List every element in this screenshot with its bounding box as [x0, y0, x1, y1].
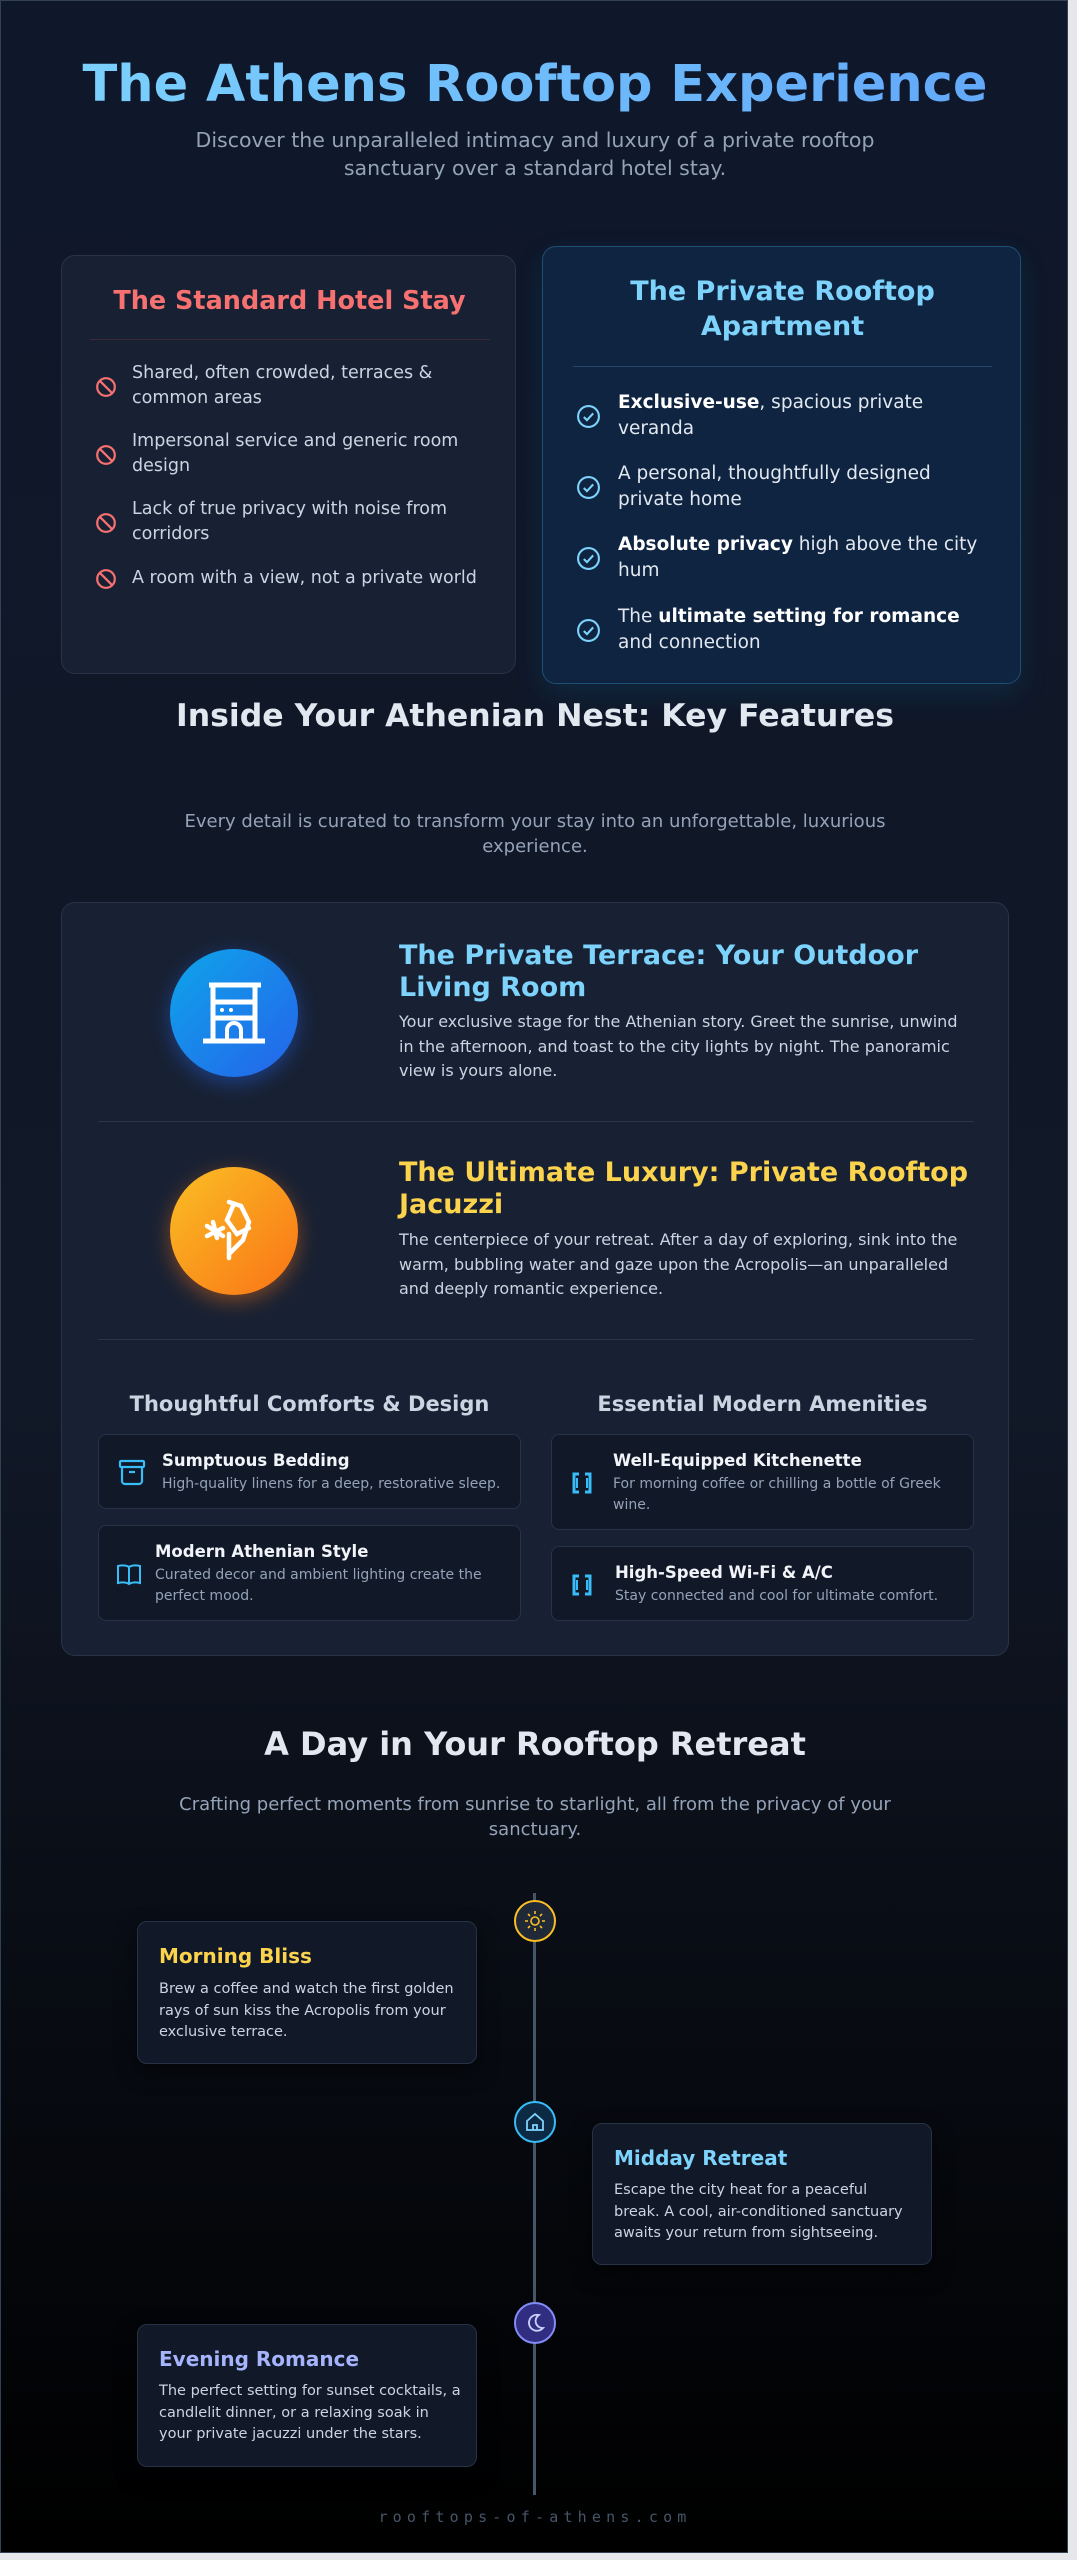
- card: kitchenette: For morning coffee or chilling a bottle of Greek wine.: [613, 1476, 941, 1513]
- text: jacuzzi body: The centerpiece of your retreat. After a day of exploring, sink into the warm, bubbling water and gaze upon the Acropolis—an unparalleled and deeply romantic experience.: [399, 1230, 957, 1298]
- card: evening romance: The perfect setting for sunset cocktails, a candlelit dinner, or a relaxing soak in your private jacuzzi under the stars.: [159, 2383, 461, 2442]
- icon: moon node: [514, 2302, 556, 2344]
- item 2: A personal, thoughtfully designed private home: [618, 463, 931, 510]
- card: modern athenian style: Modern Athenian Style: [155, 1542, 368, 1561]
- item 1: Shared, often crowded, terraces & common areas: [132, 363, 432, 408]
- card: sumptuous bedding: [98, 1434, 521, 1509]
- text: features intro: Every detail is curated to transform your stay into an unforgettable, luxurious experience.: [185, 811, 885, 857]
- heading: day timeline: A Day in Your Rooftop Retreat: [264, 1725, 806, 1763]
- list: drawbacks: [96, 363, 477, 589]
- heading: key features: Inside Your Athenian Nest: Key Features: [176, 698, 894, 734]
- panel: key features: [61, 902, 1009, 1656]
- icon: building: [170, 949, 298, 1077]
- icon: jacuzzi: [170, 1167, 298, 1295]
- card: midday retreat: [592, 2123, 932, 2265]
- heading: private rooftop: The Private Rooftop: [630, 276, 935, 307]
- card: kitchenette: [551, 1434, 974, 1530]
- card: wifi and ac: Stay connected and cool for ultimate comfort.: [615, 1588, 938, 1604]
- card: wifi and ac: [551, 1546, 974, 1621]
- card: sumptuous bedding: Sumptuous Bedding: [162, 1451, 350, 1470]
- card: modern athenian style: Curated decor and ambient lighting create the perfect mood.: [155, 1567, 482, 1604]
- text: timeline intro: Crafting perfect moments from sunrise to starlight, all from the privacy of your sanctuary.: [179, 1794, 891, 1840]
- icon: home node: [514, 2101, 556, 2143]
- icon: sun node: [514, 1900, 556, 1942]
- item 4: The ultimate setting for romance and connection: [618, 606, 960, 653]
- card: morning bliss: Morning Bliss: [159, 1944, 312, 1968]
- item 3: Absolute privacy high above the city hum: [618, 534, 977, 581]
- card: evening romance: Evening Romance: [159, 2347, 359, 2371]
- card: modern athenian style: [98, 1525, 521, 1621]
- heading: thoughtful comforts: Thoughtful Comforts & Design: [130, 1392, 489, 1416]
- text: terrace title: The Private Terrace: Your Outdoor Living Room: [399, 940, 918, 1003]
- text: terrace body: Your exclusive stage for the Athenian story. Greet the sunrise, unwind in the afternoon, and toast to the city lights by night. The panoramic view is yours alone.: [399, 1012, 957, 1080]
- card: midday retreat: Escape the city heat for a peaceful break. A cool, air-conditioned sanctuary awaits your return from sightseeing.: [614, 2182, 903, 2241]
- feature: private terrace: [158, 940, 957, 1094]
- subtitle: Discover the unparalleled intimacy and luxury of a private rooftop sanctuary over a standard hotel stay.: [196, 128, 874, 180]
- item 4: A room with a view, not a private world: [132, 568, 477, 588]
- card: sumptuous bedding: High-quality linens for a deep, restorative sleep.: [162, 1476, 500, 1492]
- list: benefits: [577, 392, 977, 653]
- card: morning bliss: Brew a coffee and watch the first golden rays of sun kiss the Acropolis from your exclusive terrace.: [159, 1981, 454, 2040]
- heading: private rooftop: Apartment: [701, 311, 864, 342]
- card: midday retreat: Midday Retreat: [614, 2146, 787, 2170]
- timeline: [137, 1893, 932, 2495]
- heading: private rooftop: [630, 276, 935, 342]
- card: morning bliss: [137, 1921, 477, 2064]
- item 1: Exclusive-use, spacious private veranda: [618, 392, 923, 439]
- heading: standard hotel: The Standard Hotel Stay: [113, 286, 466, 316]
- card: kitchenette: Well-Equipped Kitchenette: [613, 1451, 862, 1470]
- text: jacuzzi title: The Ultimate Luxury: Private Rooftop Jacuzzi: [399, 1157, 968, 1220]
- heading: modern amenities: Essential Modern Amenities: [597, 1392, 928, 1416]
- card: evening romance: [137, 2324, 477, 2467]
- panel: private rooftop apartment: [542, 246, 1021, 684]
- feature: jacuzzi: [157, 1157, 968, 1314]
- title: The Athens Rooftop Experience: [82, 55, 988, 114]
- item 3: Lack of true privacy with noise from corridors: [132, 499, 447, 544]
- panel: standard hotel stay: [61, 255, 516, 674]
- card: wifi and ac: High-Speed Wi-Fi & A/C: [615, 1563, 833, 1582]
- item 2: Impersonal service and generic room design: [132, 431, 458, 476]
- footer: rooftops-of-athens.com: [378, 2508, 692, 2526]
